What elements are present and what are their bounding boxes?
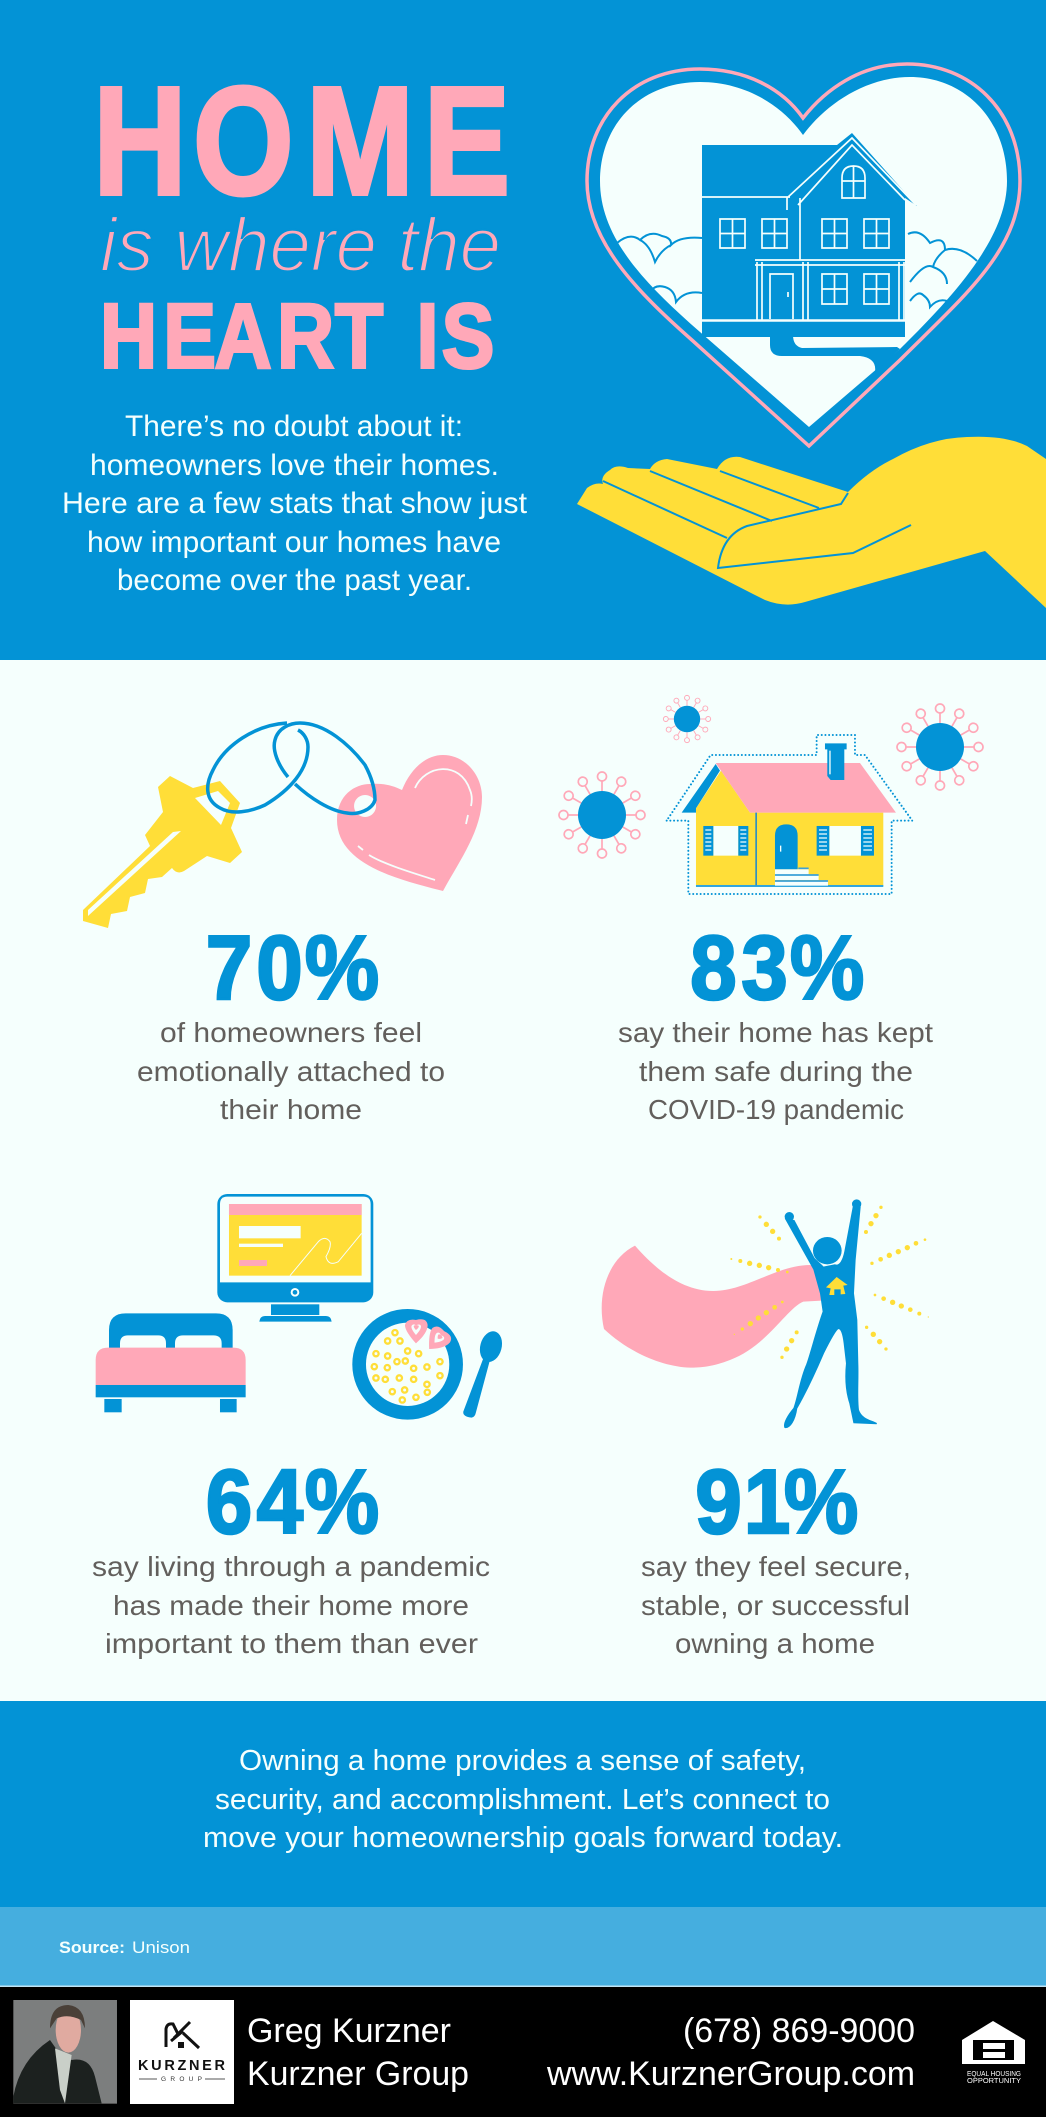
stat: 70%: emotionally attached to bbox=[137, 1056, 445, 1087]
panel: source: Unison bbox=[132, 1939, 190, 1957]
icon: key and heart keychain bbox=[83, 723, 482, 928]
stat: 64%: 64% bbox=[206, 1451, 379, 1553]
intro text: become over the past year. bbox=[117, 564, 472, 597]
title: HOME bbox=[93, 55, 510, 228]
logo bbox=[130, 2000, 234, 2104]
icon: superhero with cape bbox=[602, 1199, 929, 1427]
cottage bbox=[667, 735, 912, 894]
stat: 91%: 91% bbox=[695, 1451, 858, 1553]
panel: source bbox=[0, 1907, 1046, 1986]
key bbox=[83, 776, 242, 928]
spoon bbox=[463, 1329, 505, 1418]
title bbox=[93, 55, 510, 388]
title: is where the bbox=[100, 203, 501, 288]
intro text: homeowners love their homes. bbox=[90, 449, 499, 482]
agent name bbox=[247, 2012, 469, 2093]
stat: 91%: owning a home bbox=[675, 1628, 875, 1659]
icon: heart with house bbox=[587, 64, 1020, 446]
stat: 70%: of homeowners feel bbox=[160, 1017, 422, 1048]
agent name: Greg Kurzner bbox=[247, 2012, 451, 2050]
stat: 91% bbox=[641, 1451, 911, 1659]
bed bbox=[96, 1313, 246, 1412]
stat: 83%: COVID-19 pandemic bbox=[648, 1094, 904, 1125]
panel: header bbox=[0, 0, 1046, 660]
stat: 83% bbox=[618, 917, 933, 1125]
heart tag bbox=[337, 755, 482, 891]
intro text bbox=[62, 410, 528, 597]
cape bbox=[602, 1246, 827, 1368]
contact details: (678) 869-9000 bbox=[683, 2012, 915, 2050]
panel: call to action bbox=[0, 1701, 1046, 1907]
icon: house and viruses bbox=[559, 695, 983, 894]
stat: 70%: 70% bbox=[206, 917, 379, 1019]
rays bbox=[730, 1206, 929, 1359]
title: HEART IS bbox=[100, 285, 494, 388]
intro text: how important our homes have bbox=[87, 526, 501, 559]
stat: 91%: stable, or successful bbox=[641, 1590, 910, 1621]
panel: agent footer bbox=[0, 1986, 1046, 2117]
monitor bbox=[217, 1194, 373, 1322]
stat: 64%: important to them than ever bbox=[105, 1628, 478, 1659]
stat: 64%: say living through a pandemic bbox=[92, 1551, 490, 1582]
panel: call to action: security, and accomplishment. Let’s connect to bbox=[215, 1784, 830, 1816]
stat: 83%: them safe during the bbox=[639, 1056, 913, 1087]
panel: call to action: move your homeownership goals forward today. bbox=[203, 1822, 843, 1854]
icon: monitor, bed and bowl bbox=[96, 1194, 505, 1420]
logo: GROUP bbox=[161, 2076, 202, 2083]
panel: stats bbox=[0, 660, 1046, 1701]
panel: source: Source: bbox=[59, 1939, 125, 1957]
icon: equal housing opportunity: OPPORTUNITY bbox=[967, 2078, 1021, 2085]
stat: 83%: 83% bbox=[690, 917, 864, 1019]
intro text: There’s no doubt about it: bbox=[125, 410, 463, 443]
contact details: www.KurznerGroup.com bbox=[546, 2055, 915, 2093]
agent name: Kurzner Group bbox=[247, 2055, 469, 2093]
figure bbox=[785, 1199, 877, 1427]
virus icons bbox=[559, 695, 983, 858]
bowl bbox=[352, 1309, 505, 1420]
chest house emblem bbox=[826, 1277, 848, 1295]
stat: 64% bbox=[92, 1451, 490, 1659]
contact details bbox=[546, 2012, 915, 2093]
stat: 64%: has made their home more bbox=[113, 1590, 469, 1621]
panel: call to action: Owning a home provides a sense of safety, bbox=[239, 1745, 806, 1777]
key rings bbox=[208, 723, 375, 813]
stat: 70% bbox=[137, 917, 445, 1125]
stat: 70%: their home bbox=[220, 1094, 362, 1125]
logo: KURZNER bbox=[138, 2058, 226, 2074]
intro text: Here are a few stats that show just bbox=[62, 487, 528, 520]
clouds bbox=[617, 232, 977, 307]
stat: 83%: say their home has kept bbox=[618, 1017, 933, 1048]
agent photo bbox=[13, 2000, 117, 2104]
house bbox=[702, 133, 917, 337]
icon: equal housing opportunity bbox=[962, 2021, 1025, 2085]
icon: hand bbox=[577, 437, 1046, 608]
stat: 91%: say they feel secure, bbox=[641, 1551, 911, 1582]
icon: equal housing opportunity: EQUAL HOUSING bbox=[967, 2071, 1021, 2078]
